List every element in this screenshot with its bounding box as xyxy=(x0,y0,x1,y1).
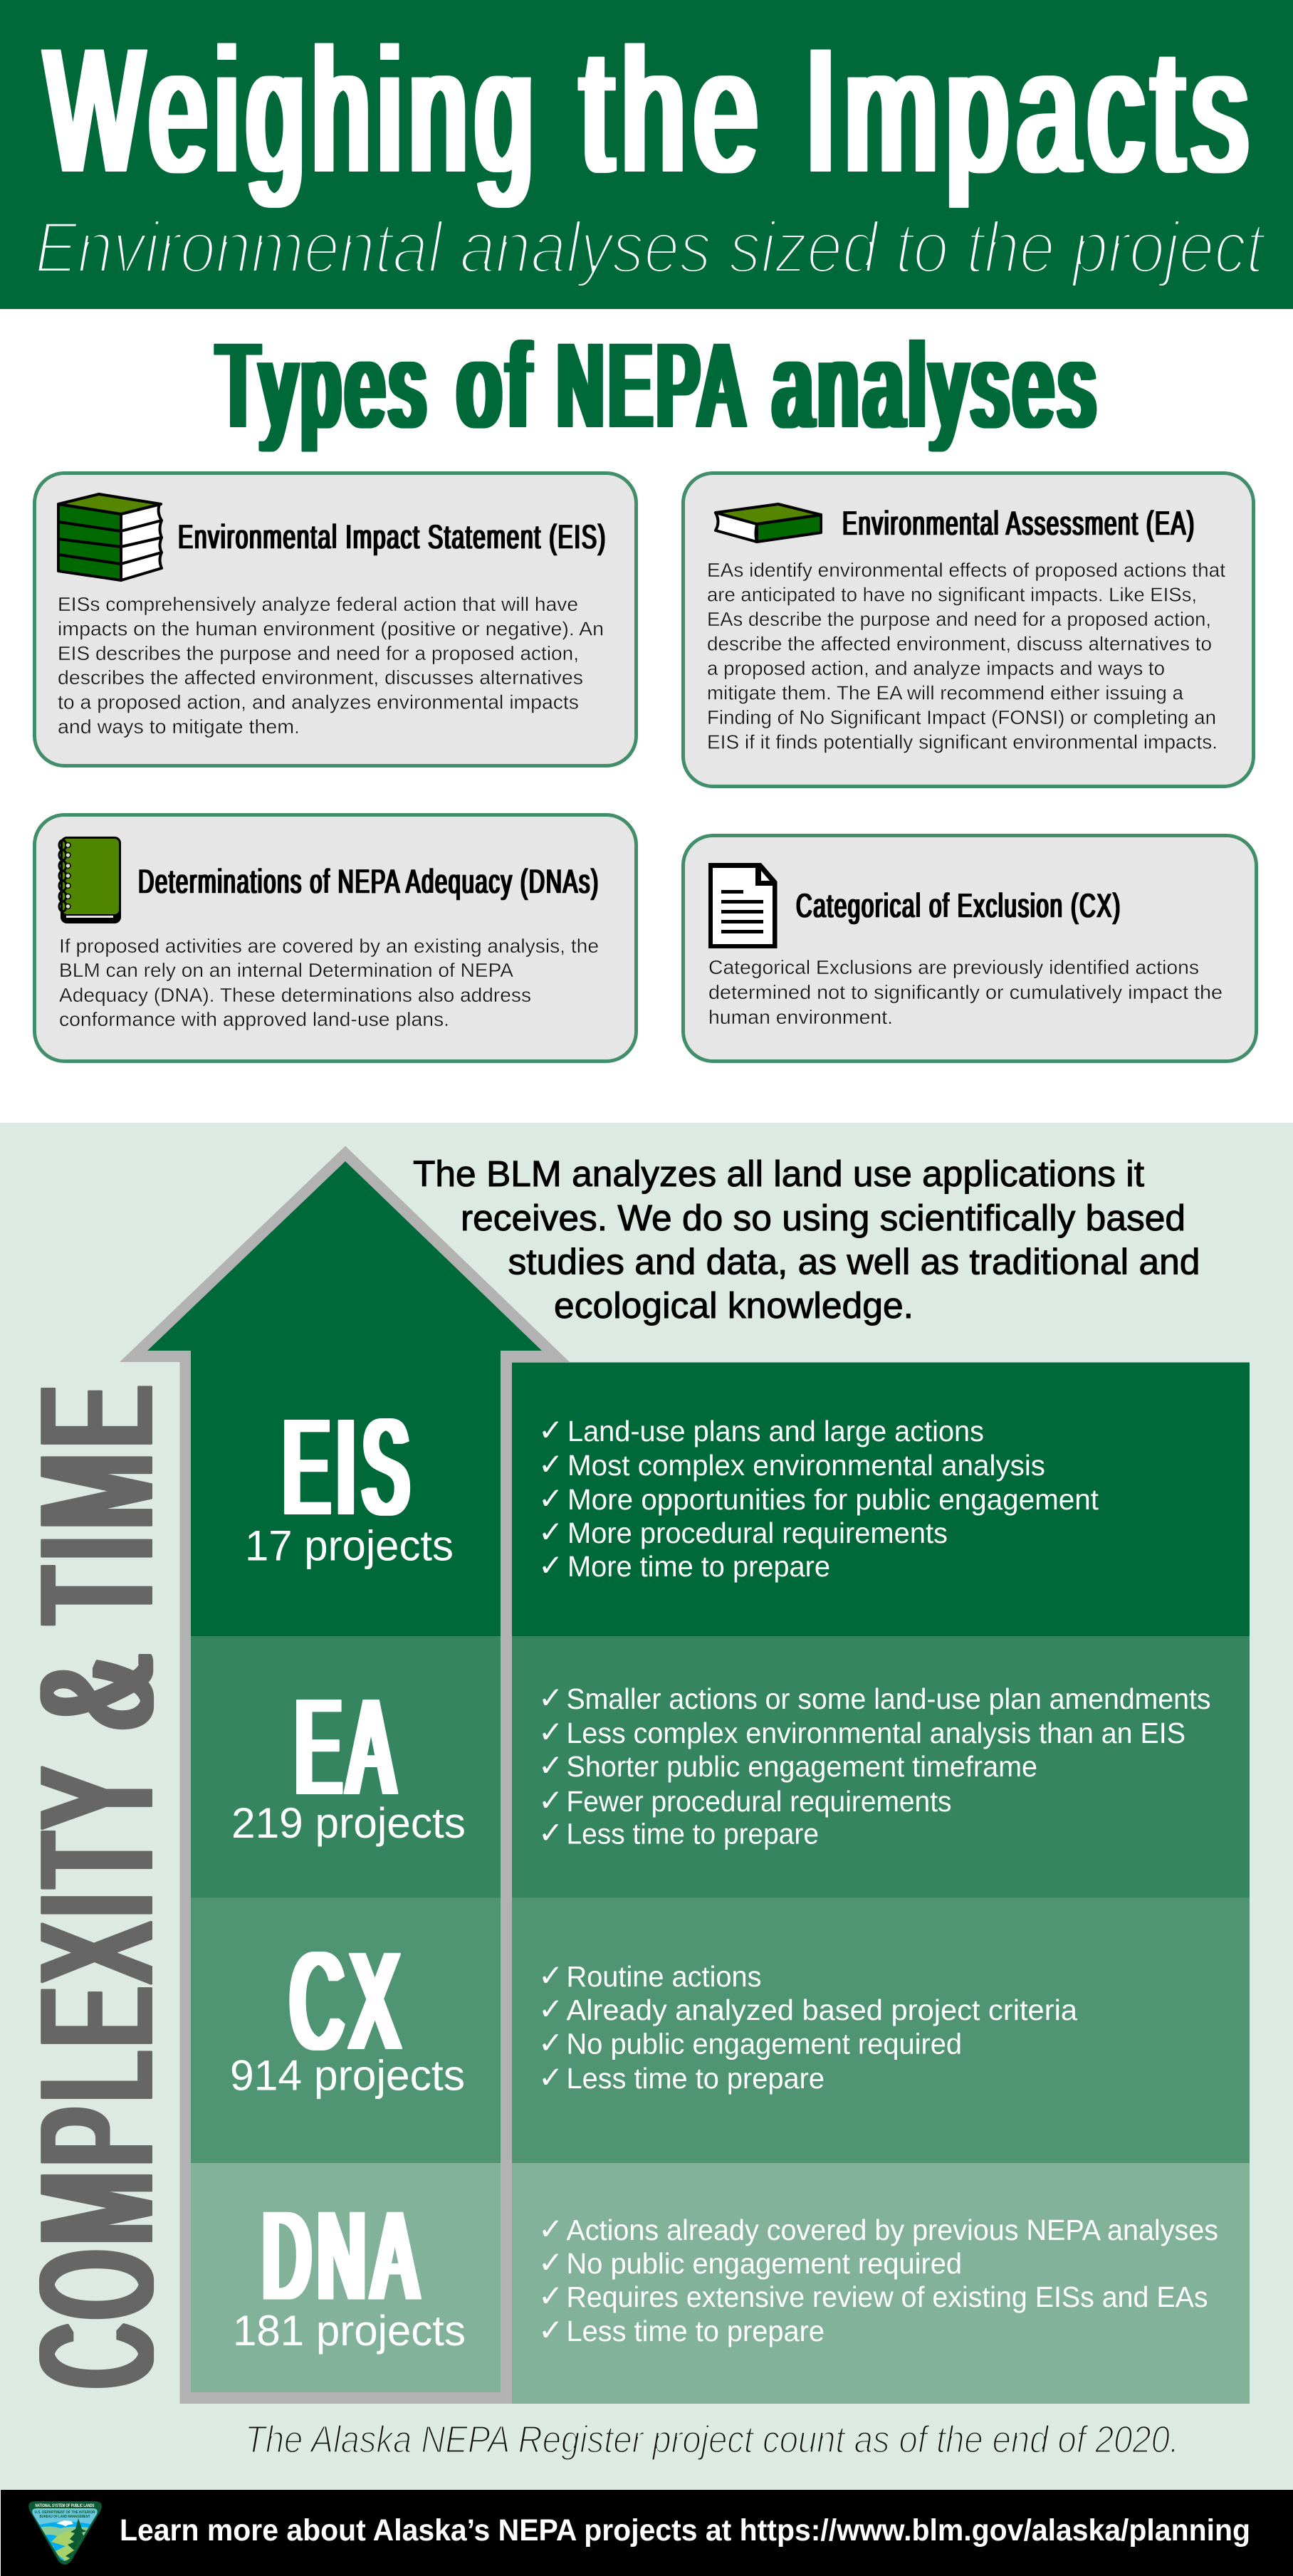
panel: categorical exclusion xyxy=(684,836,1256,1061)
DNA row label: DNA xyxy=(263,2186,424,2325)
vertical label: complexity and time: TIME xyxy=(9,1380,185,1623)
logo: BLM triangle: U.S. DEPARTMENT OF THE INTERIOR xyxy=(34,2510,95,2515)
card text: EIS describes the purpose and need for a proposed action, xyxy=(58,642,579,664)
intro text: ecological knowledge. xyxy=(554,1285,914,1326)
card text: and ways to mitigate them. xyxy=(58,716,300,738)
card title: Determinations of NEPA Adequacy (DNAs) xyxy=(138,862,600,900)
card text: Adequacy (DNA). These determinations also address xyxy=(59,984,531,1006)
EA row label: EA xyxy=(295,1672,401,1823)
card text: Categorical Exclusions are previously identified actions xyxy=(708,956,1199,978)
heading: types of NEPA analyses xyxy=(217,320,1101,451)
intro text: receives. We do so using scientifically based xyxy=(461,1198,1185,1238)
table background rows xyxy=(512,1363,1250,2404)
card text xyxy=(707,559,1225,753)
title: Weighing xyxy=(46,13,541,208)
EIS checklist: ✓ xyxy=(538,1514,563,1549)
EIS checklist: More procedural requirements xyxy=(567,1517,948,1549)
title: the xyxy=(581,13,767,208)
CX row label: CX xyxy=(290,1924,407,2078)
DNA checklist: ✓ xyxy=(538,2278,563,2313)
footer bar xyxy=(1,2490,1293,2576)
card text xyxy=(58,593,604,738)
card text: EISs comprehensively analyze federal action that will have xyxy=(58,593,578,615)
CX checklist: ✓ xyxy=(538,2025,563,2061)
card text: mitigate them. The EA will recommend either issuing a xyxy=(707,682,1183,703)
card text: determined not to significantly or cumulatively impact the xyxy=(708,981,1223,1003)
EIS row label xyxy=(245,1393,454,1569)
card text: to a proposed action, and analyzes environmental impacts xyxy=(58,691,579,713)
card text: are anticipated to have no significant impacts. Like EISs, xyxy=(707,584,1197,605)
DNA checklist: No public engagement required xyxy=(567,2247,962,2280)
card text: EIS if it finds potentially significant environmental impacts. xyxy=(707,731,1218,753)
EIS checklist xyxy=(538,1413,1099,1583)
DNA checklist: Actions already covered by previous NEPA analyses xyxy=(567,2214,1218,2246)
card text xyxy=(59,935,599,1030)
heading: types of NEPA analyses: NEPA xyxy=(557,320,748,451)
DNA checklist: ✓ xyxy=(538,2313,563,2347)
panel: complexity and time section background xyxy=(0,1123,1293,2490)
title xyxy=(46,13,1257,208)
icon: single book xyxy=(716,504,821,542)
intro text: studies and data, as well as traditional and xyxy=(508,1242,1200,1282)
EIS checklist: Most complex environmental analysis xyxy=(567,1449,1045,1482)
DNA checklist: Requires extensive review of existing EISs and EAs xyxy=(567,2281,1208,2313)
intro text xyxy=(413,1153,1200,1326)
EA checklist: ✓ xyxy=(538,1748,563,1783)
vertical label: complexity and time: & xyxy=(9,1658,185,1728)
card text: describes the affected environment, discusses alternatives xyxy=(58,666,583,688)
card text: human environment. xyxy=(708,1006,893,1028)
EA checklist: Fewer procedural requirements xyxy=(567,1785,951,1818)
DNA checklist xyxy=(538,2211,1218,2347)
card text xyxy=(708,956,1223,1028)
card text: describe the affected environment, discuss alternatives to xyxy=(707,632,1212,655)
EA checklist: Less time to prepare xyxy=(567,1817,819,1850)
logo: BLM triangle: BUREAU OF LAND MANAGEMENT xyxy=(40,2515,90,2519)
EA checklist: Less complex environmental analysis than an EIS xyxy=(567,1717,1185,1749)
footer link text: Learn more about Alaska’s NEPA projects at https://www.blm.gov/alaska/planning xyxy=(120,2513,1250,2548)
EA checklist: ✓ xyxy=(538,1816,563,1850)
card text: a proposed action, and analyze impacts and ways to xyxy=(707,657,1165,679)
EIS checklist: ✓ xyxy=(538,1413,563,1447)
EIS checklist: More time to prepare xyxy=(567,1550,830,1583)
card text: EAs describe the purpose and need for a proposed action, xyxy=(707,608,1211,630)
card text: If proposed activities are covered by an existing analysis, the xyxy=(59,935,599,957)
header banner xyxy=(0,0,1293,309)
footnote: The Alaska NEPA Register project count as of the end of 2020. xyxy=(245,2418,1179,2461)
icon: document xyxy=(708,863,778,948)
heading: types of NEPA analyses: of xyxy=(458,320,536,451)
EIS checklist: ✓ xyxy=(538,1481,563,1516)
project count: 914 projects xyxy=(230,2052,465,2099)
EA checklist: Smaller actions or some land-use plan amendments xyxy=(567,1682,1210,1715)
DNA checklist: ✓ xyxy=(538,2245,563,2280)
EA checklist: Shorter public engagement timeframe xyxy=(567,1750,1037,1783)
card text: impacts on the human environment (positive or negative). An xyxy=(58,618,604,639)
panel: environmental assessment xyxy=(684,473,1253,786)
card title: Categorical of Exclusion (CX) xyxy=(796,886,1121,924)
EA checklist: ✓ xyxy=(538,1714,563,1749)
CX checklist: No public engagement required xyxy=(567,2028,962,2061)
arrow xyxy=(120,1146,570,2404)
card text: BLM can rely on an internal Determination of NEPA xyxy=(59,959,513,981)
EIS checklist: Land-use plans and large actions xyxy=(567,1415,984,1447)
EIS checklist: ✓ xyxy=(538,1447,563,1482)
intro text: The BLM analyzes all land use applications it xyxy=(413,1153,1144,1194)
icon: stack of books xyxy=(58,494,162,580)
icon: spiral notebook xyxy=(59,837,121,923)
project count: 219 projects xyxy=(231,1799,466,1847)
panel: environmental impact statement xyxy=(34,473,637,766)
CX checklist: Routine actions xyxy=(567,1960,762,1993)
EA checklist xyxy=(538,1680,1210,1850)
EIS checklist: More opportunities for public engagement xyxy=(567,1483,1099,1516)
logo text: NATIONAL SYSTEM OF PUBLIC LANDS xyxy=(36,2504,94,2508)
project count: 181 projects xyxy=(233,2307,466,2355)
CX checklist xyxy=(538,1958,1077,2095)
DNA checklist: ✓ xyxy=(538,2211,563,2246)
EA row label xyxy=(231,1672,466,1847)
CX row label xyxy=(230,1924,465,2099)
EA checklist: ✓ xyxy=(538,1783,563,1818)
CX checklist: ✓ xyxy=(538,1991,563,2026)
DNA row label xyxy=(233,2186,466,2355)
CX checklist: ✓ xyxy=(538,2060,563,2095)
CX checklist: ✓ xyxy=(538,1958,563,1993)
EIS checklist: ✓ xyxy=(538,1548,563,1583)
card title: Environmental Impact Statement (EIS) xyxy=(178,518,607,555)
card text: conformance with approved land-use plans. xyxy=(59,1008,449,1030)
panel: determinations of NEPA adequacy xyxy=(34,815,637,1061)
vertical label: complexity and time: COMPLEXITY xyxy=(9,1762,185,2387)
heading: types of NEPA analyses: Types xyxy=(217,320,431,451)
logo: BLM triangle xyxy=(28,2501,102,2570)
card text: Finding of No Significant Impact (FONSI) or completing an xyxy=(707,706,1216,728)
project count: 17 projects xyxy=(245,1522,454,1569)
CX checklist: Already analyzed based project criteria xyxy=(567,1994,1077,2026)
card text: EAs identify environmental effects of proposed actions that xyxy=(707,559,1225,581)
EA checklist: ✓ xyxy=(538,1680,563,1715)
DNA checklist: Less time to prepare xyxy=(567,2315,825,2347)
CX checklist: Less time to prepare xyxy=(567,2062,825,2095)
EIS row label: EIS xyxy=(283,1393,416,1542)
